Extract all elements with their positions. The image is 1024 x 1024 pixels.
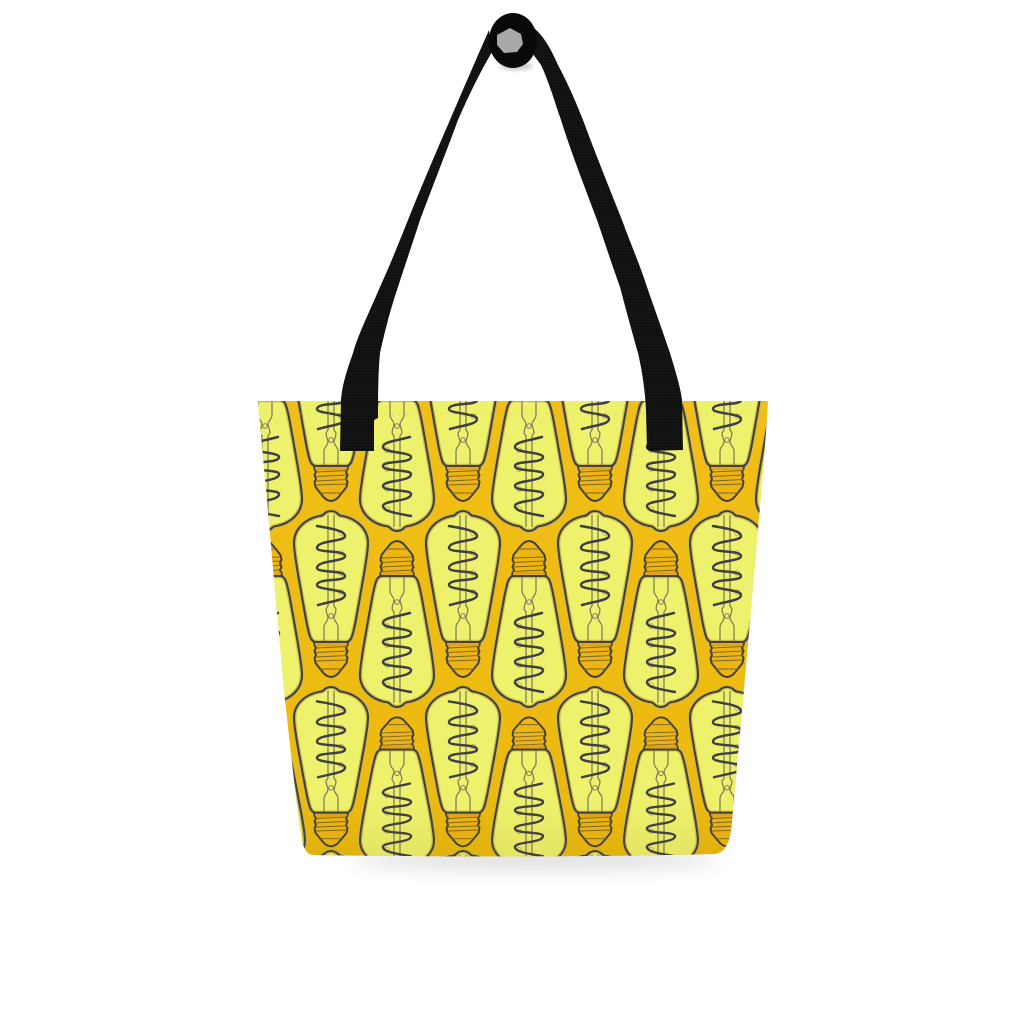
bulb row 4 top edge, column 463 xyxy=(443,848,484,856)
bulb row 3 base-up, column 661 xyxy=(624,717,698,870)
bulb row 1 base-down, column 727 xyxy=(692,401,762,502)
bulb row 1 base-down, column 331 xyxy=(296,401,357,502)
bulb row 1 base-up, column 661 xyxy=(622,401,700,534)
bulb row 2 base-up, column 661 xyxy=(624,541,698,707)
right handle strap xyxy=(530,25,683,451)
bulb row 3 base-down, column 727 xyxy=(688,684,744,847)
bulb row 3 base-up, column 268 xyxy=(290,753,308,850)
bulb row 3 base-up, column 397 xyxy=(360,717,434,870)
bottom fold shading xyxy=(302,838,725,856)
bulb row 1 base-up, column 265 xyxy=(258,401,304,532)
bulb row 4 top edge, column 331 xyxy=(314,848,350,856)
tote bag body with bulb pattern xyxy=(258,401,768,856)
bulb row 2 base-down, column 595 xyxy=(558,511,632,677)
left handle strap xyxy=(340,30,492,451)
bulb row 2 base-up, column 265 xyxy=(270,542,304,702)
bulb row 4 top edge, column 595 xyxy=(574,848,614,856)
bag fabric background xyxy=(250,395,775,865)
bulb row 1 base-down, column 463 xyxy=(428,401,498,502)
bulb row 1 base-up, column 397 xyxy=(358,401,436,534)
wall hook peg xyxy=(489,13,537,70)
bulb row 1 base-up, column 793 xyxy=(754,414,768,516)
bulb row 1 base-down, column 595 xyxy=(560,401,630,502)
bulb row 3 base-down, column 595 xyxy=(558,687,632,846)
bulb row 3 base-down, column 331 xyxy=(294,687,368,846)
bulb row 1 base-up, column 529 xyxy=(490,401,568,534)
bulb row 2 base-up, column 397 xyxy=(360,541,434,707)
bulb row 2 base-up, column 529 xyxy=(492,541,566,707)
bulb row 3 base-up, column 529 xyxy=(492,717,566,870)
bulb row 3 base-down, column 463 xyxy=(426,687,500,846)
bulb row 2 base-down, column 463 xyxy=(426,511,500,677)
bulb row 2 base-down, column 331 xyxy=(294,511,368,677)
bag ground shadow xyxy=(350,851,720,869)
bulb row 2 base-down, column 727 xyxy=(690,511,764,677)
